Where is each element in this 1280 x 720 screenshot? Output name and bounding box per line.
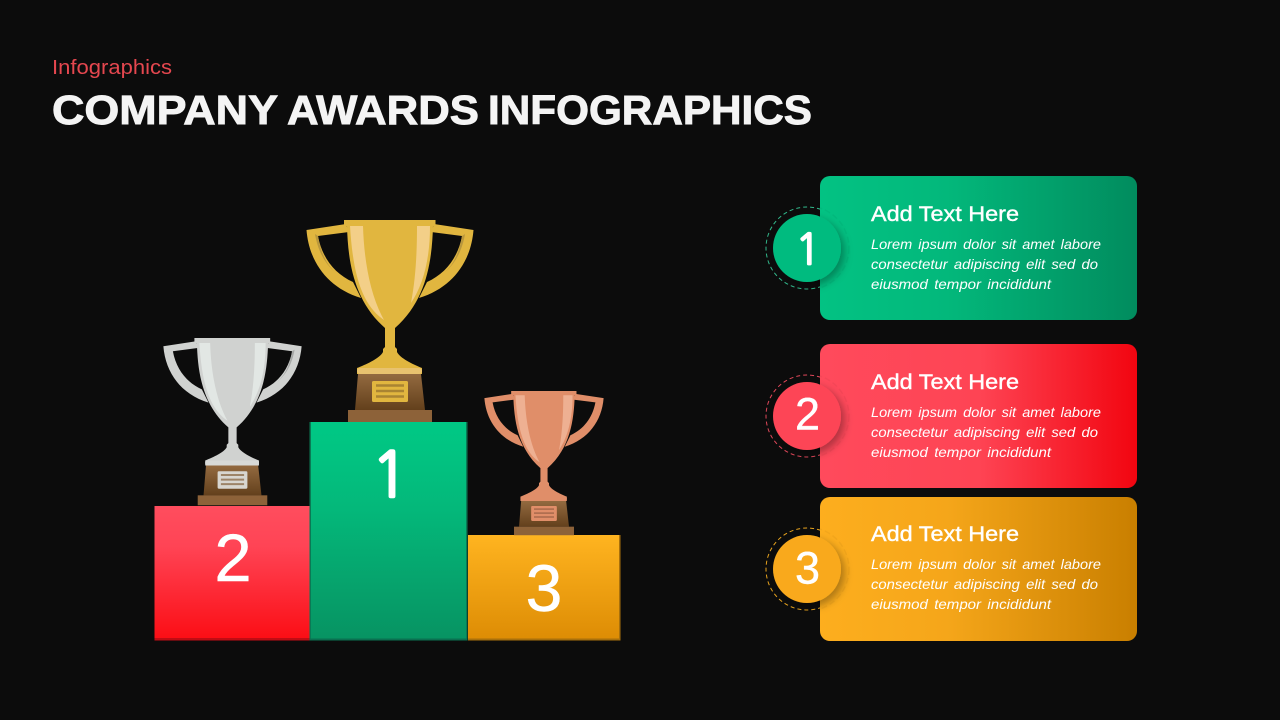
title: COMPANY bbox=[52, 87, 278, 133]
badge 1 bbox=[773, 214, 841, 282]
card 2 body: consectetur adipiscing elit sed do bbox=[871, 424, 1098, 440]
card 1 heading: Add Text Here bbox=[871, 203, 1019, 226]
dashed ring 2 bbox=[766, 375, 848, 457]
card 1 body: Lorem ipsum dolor sit amet labore bbox=[871, 236, 1101, 252]
dashed ring 1 bbox=[766, 207, 848, 289]
card 3 body: eiusmod tempor incididunt bbox=[871, 596, 1052, 612]
eyebrow label: Infographics bbox=[52, 57, 172, 79]
trophy: bronze bbox=[484, 391, 604, 535]
card 3 heading: Add Text Here bbox=[871, 523, 1019, 546]
panel: award 1 bbox=[765, 176, 1137, 320]
panel: award 3 bbox=[765, 497, 1137, 641]
badge number 2: 2 bbox=[795, 388, 820, 440]
podium step 3: 3 bbox=[526, 551, 562, 625]
card 3 bbox=[820, 497, 1137, 641]
panel: award 2 bbox=[765, 344, 1137, 488]
podium step 1 bbox=[310, 422, 468, 640]
card 1 body: eiusmod tempor incididunt bbox=[871, 276, 1052, 292]
podium step 2 bbox=[154, 506, 310, 640]
trophy: gold bbox=[306, 220, 474, 422]
podium step 2: 2 bbox=[214, 521, 252, 596]
badge number 3: 3 bbox=[795, 542, 820, 594]
card 2 heading: Add Text Here bbox=[871, 371, 1019, 394]
card 2 bbox=[820, 344, 1137, 488]
badge number 1: 1 bbox=[795, 230, 821, 272]
card 2 body: eiusmod tempor incididunt bbox=[871, 444, 1052, 460]
podium bbox=[154, 422, 620, 640]
podium step 3 bbox=[468, 535, 620, 640]
title: INFOGRAPHICS bbox=[488, 87, 812, 133]
trophy: silver bbox=[163, 338, 302, 505]
card 1 body: consectetur adipiscing elit sed do bbox=[871, 256, 1098, 272]
badge 2 bbox=[773, 382, 841, 450]
dashed ring 3 bbox=[766, 528, 848, 610]
title: AWARDS bbox=[287, 87, 479, 133]
card 1 bbox=[820, 176, 1137, 320]
podium step 1: 1 bbox=[371, 444, 409, 506]
card 3 body: consectetur adipiscing elit sed do bbox=[871, 576, 1098, 592]
card 3 body: Lorem ipsum dolor sit amet labore bbox=[871, 556, 1101, 572]
card 2 body: Lorem ipsum dolor sit amet labore bbox=[871, 404, 1101, 420]
badge 3 bbox=[773, 535, 841, 603]
